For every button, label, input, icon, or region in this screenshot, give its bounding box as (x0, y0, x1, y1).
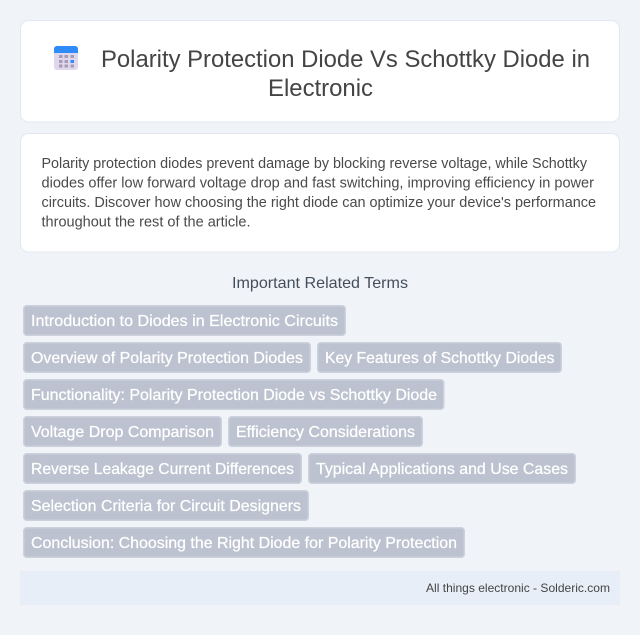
tag: applications: Typical Applications and Use Cases (316, 461, 568, 478)
panel: description card: circuits. Discover how choosing the right diode can optimize your device's performance (42, 195, 596, 211)
panel: description card: throughout the rest of the article. (42, 214, 250, 230)
tag: reverse leakage: Reverse Leakage Current Differences (31, 461, 294, 478)
tag: voltage drop: Voltage Drop Comparison (31, 424, 214, 441)
tag: selection criteria (24, 491, 308, 520)
icon: calendar (54, 46, 78, 70)
tag: key features: Key Features of Schottky Diodes (325, 350, 554, 367)
tag: conclusion (24, 528, 464, 557)
footer (20, 571, 620, 605)
title (101, 46, 590, 102)
footer: All things electronic - Solderic.com (426, 581, 610, 595)
tag: voltage drop (24, 417, 221, 446)
tag: efficiency: Efficiency Considerations (236, 424, 415, 441)
heading: important related terms: Important Related Terms (232, 275, 408, 292)
panel: description card (20, 134, 620, 252)
tag: key features (318, 343, 561, 372)
tag: selection criteria: Selection Criteria for Circuit Designers (31, 498, 301, 515)
tag: conclusion: Conclusion: Choosing the Right Diode for Polarity Protection (31, 535, 457, 552)
tag: overview (24, 343, 310, 372)
panel: description card: Polarity protection diodes prevent damage by blocking reverse voltage, while Schottky (42, 156, 588, 172)
tag: efficiency (229, 417, 422, 446)
title: Electronic (268, 75, 373, 102)
tag list (24, 306, 575, 557)
tag: introduction (24, 306, 345, 335)
tag: applications (309, 454, 575, 483)
tag: reverse leakage (24, 454, 301, 483)
tag: overview: Overview of Polarity Protection Diodes (31, 350, 303, 367)
tag: functionality: Functionality: Polarity Protection Diode vs Schottky Diode (31, 387, 437, 404)
tag: introduction: Introduction to Diodes in Electronic Circuits (31, 313, 338, 330)
panel: description card: diodes offer low forward voltage drop and fast switching, improving efficiency in power (42, 176, 594, 192)
panel: title card (20, 20, 620, 122)
title: Polarity Protection Diode Vs Schottky Diode in (101, 46, 590, 73)
tag: functionality (24, 380, 444, 409)
